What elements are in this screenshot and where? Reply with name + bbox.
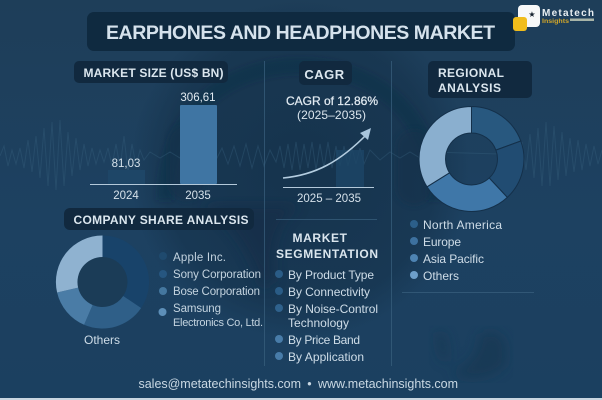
list: segments: By Product Type	[288, 268, 374, 282]
bar chart	[90, 92, 237, 202]
panel: market segmentation	[275, 231, 378, 364]
panel: regional analysis	[410, 61, 532, 283]
logo: Metatech Insights: Metatech	[542, 8, 594, 19]
footer contact line: •	[307, 377, 312, 391]
legend: regions: Asia Pacific	[423, 252, 484, 266]
bar chart: 81,03	[112, 158, 140, 170]
heading: regional analysis: REGIONAL	[438, 66, 504, 80]
bar chart: 306,61	[180, 92, 216, 104]
CAGR value: CAGR of 12.86%	[286, 94, 378, 108]
panel: CAGR	[283, 61, 378, 205]
legend: companies: Bose Corporation	[173, 286, 260, 298]
list: segments	[275, 268, 378, 364]
donut chart: regions	[419, 106, 524, 211]
legend: companies: Electronics Co, Ltd.	[173, 317, 263, 329]
legend: companies: Sony Corporation	[173, 269, 261, 281]
heading: CAGR	[299, 61, 352, 85]
legend: companies	[158, 252, 263, 329]
heading: market segmentation	[276, 231, 378, 261]
list: segments: By Connectivity	[288, 285, 370, 299]
legend: regions: Europe	[423, 235, 461, 249]
label: others: Others	[84, 333, 120, 347]
list: segments: By Noise-Control	[288, 302, 378, 316]
legend: companies: Apple Inc.	[173, 252, 226, 264]
title: EARPHONES AND HEADPHONES MARKET	[106, 22, 495, 44]
footer contact line: sales@metatechinsights.com	[138, 377, 301, 391]
panel: market size	[74, 61, 237, 202]
footer contact line: www.metachinsights.com	[317, 377, 458, 391]
heading: market size	[74, 61, 228, 83]
sound waveform	[0, 120, 602, 190]
icon: logo squares: ★	[528, 10, 536, 19]
divider lines	[264, 61, 534, 366]
list: segments: Technology	[288, 316, 349, 330]
heading: company share analysis: COMPANY SHARE ANALYSIS	[74, 213, 248, 227]
legend: regions	[410, 218, 502, 283]
legend: regions: North America	[423, 218, 502, 232]
panel: company share analysis	[56, 208, 263, 347]
list: segments: By Application	[288, 350, 364, 364]
logo: Metatech Insights	[513, 5, 594, 31]
heading: market size: MARKET SIZE (US$ BN)	[84, 66, 224, 80]
list: segments: By Price Band	[288, 333, 360, 347]
bar chart: 2024	[113, 190, 139, 202]
legend: companies: Samsung	[173, 303, 221, 315]
heading: CAGR: CAGR	[304, 67, 345, 82]
title	[87, 12, 515, 51]
donut chart: company share	[56, 235, 149, 329]
logo: Metatech Insights: Insights	[542, 18, 569, 25]
CAGR period: (2025–2035)	[297, 108, 366, 122]
growth chart	[283, 128, 374, 205]
legend: regions: Others	[423, 269, 459, 283]
heading: regional analysis	[428, 61, 532, 98]
heading: market segmentation: MARKET	[292, 231, 348, 245]
heading: company share analysis	[64, 208, 254, 230]
bar chart: 2035	[185, 190, 211, 202]
footer contact line	[138, 377, 458, 391]
heading: regional analysis: ANALYSIS	[438, 81, 501, 95]
growth chart: 2025 – 2035	[297, 193, 361, 205]
heading: market segmentation: SEGMENTATION	[276, 247, 378, 261]
